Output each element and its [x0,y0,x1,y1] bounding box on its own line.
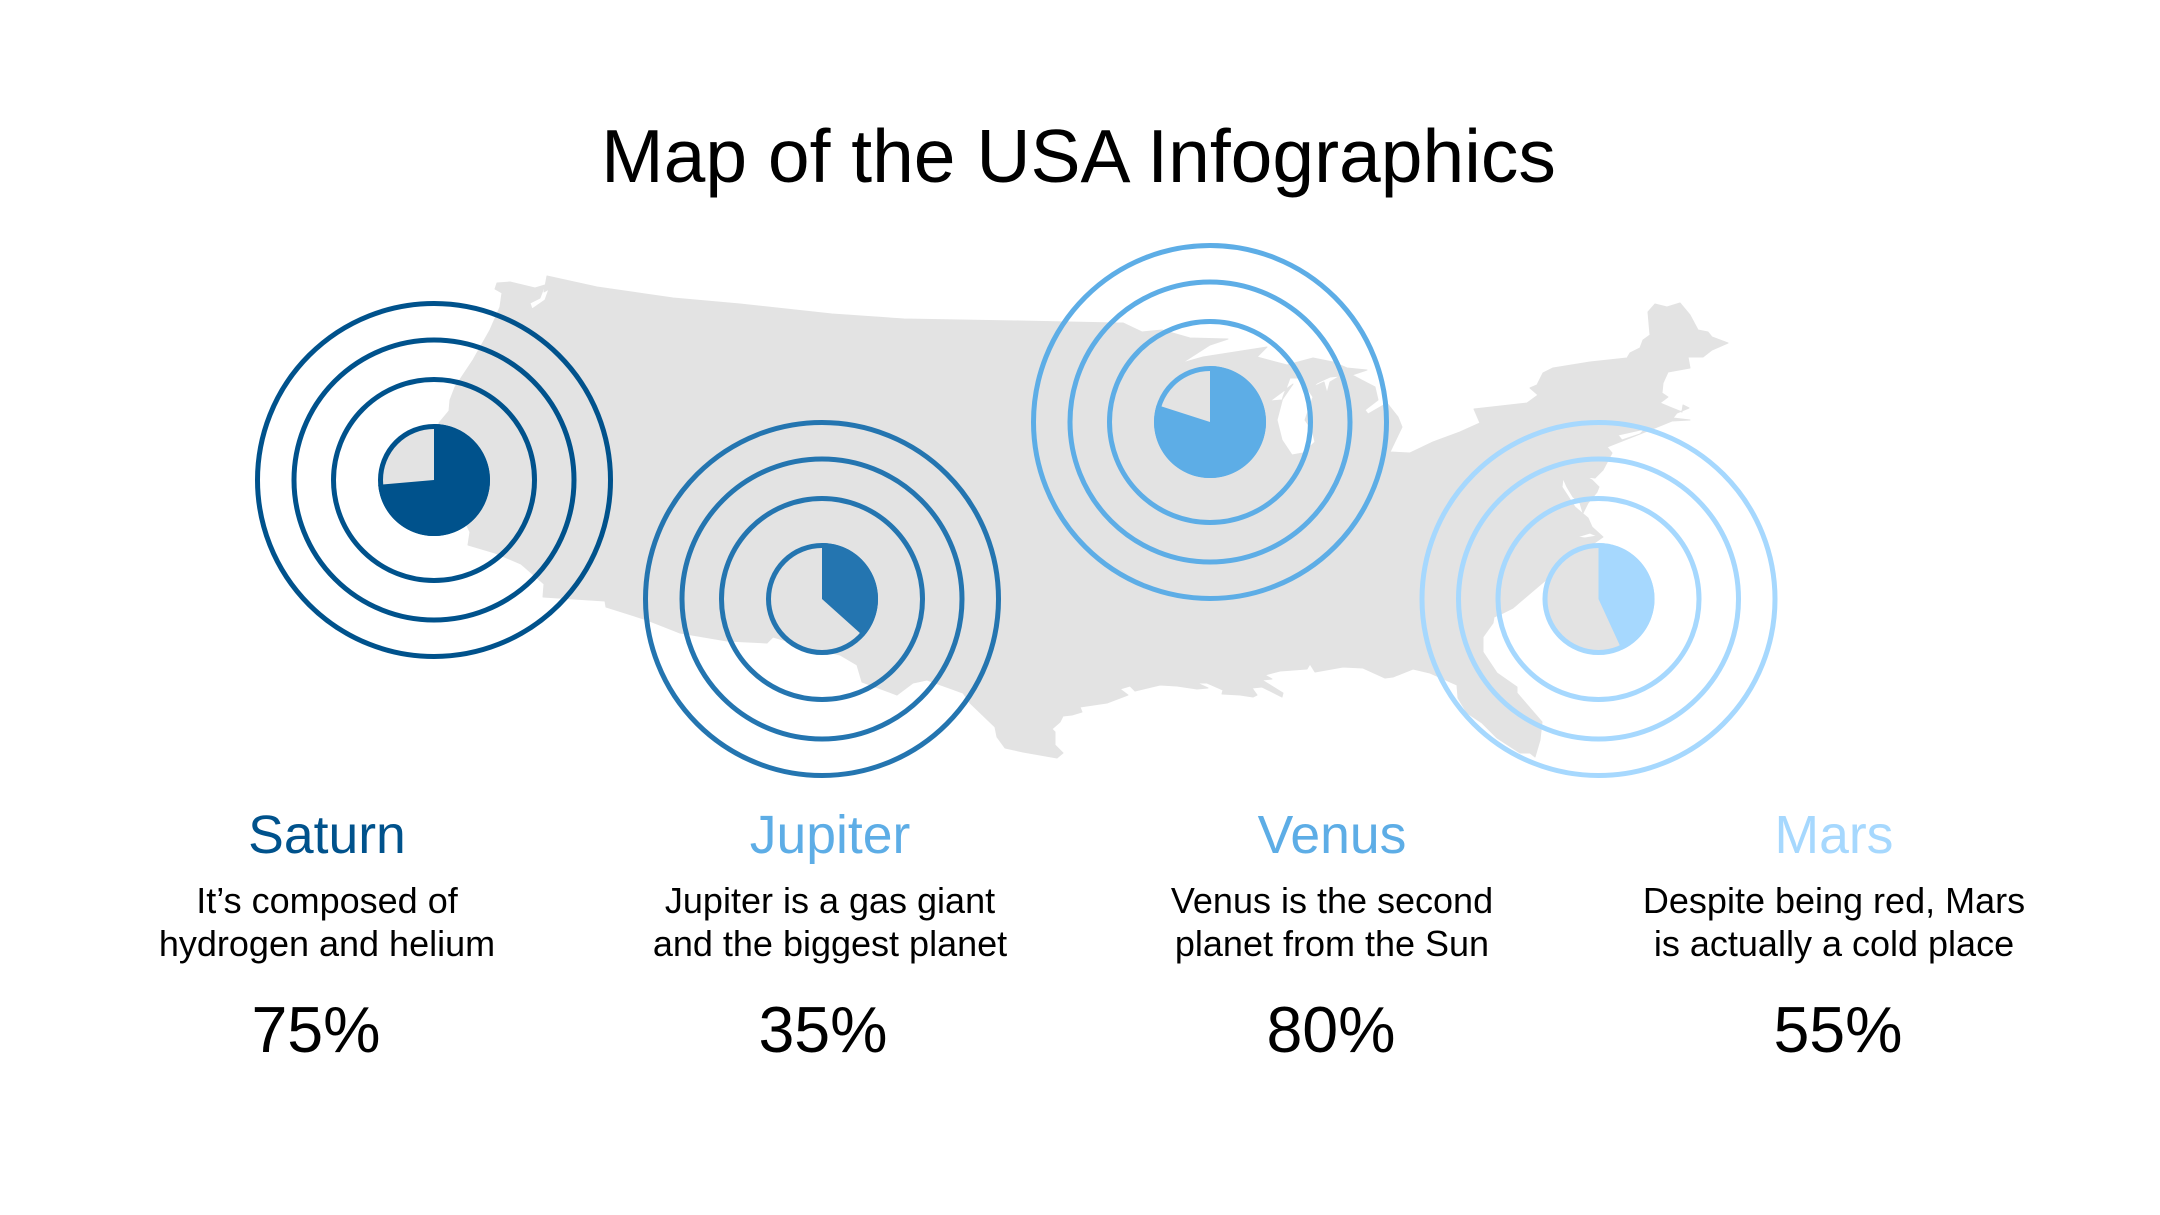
description: Jupiter: and the biggest planet [653,923,1007,964]
heading: Mars: Mars [1775,806,1893,865]
value: Jupiter: 35% [758,994,888,1066]
pie: Venus 80% [1154,366,1266,478]
target: Mars [1422,422,1775,776]
column: Mars [1643,806,2025,1066]
description: Saturn: hydrogen and helium [159,923,495,964]
column: Saturn [159,806,495,1066]
description: Jupiter: Jupiter is a gas giant [665,880,995,921]
target: Venus [1034,246,1386,598]
pie: Saturn 75% [378,424,490,536]
value: Mars: 55% [1773,994,1903,1066]
pie: Mars 55% [1545,543,1655,652]
column: Jupiter [653,806,1007,1066]
description: Saturn: It’s composed of [196,880,459,921]
target: Saturn [258,304,610,656]
value: Saturn: 75% [251,994,381,1066]
heading: Jupiter: Jupiter [750,806,910,865]
description: Venus: planet from the Sun [1175,923,1489,964]
title: Map of the USA Infographics [601,114,1556,198]
column: Venus [1171,806,1493,1066]
heading: Venus: Venus [1258,806,1406,865]
description: Mars: Despite being red, Mars [1643,880,2025,921]
map of the USA [439,276,1728,758]
description: Venus: Venus is the second [1171,880,1493,921]
heading: Saturn: Saturn [248,806,406,865]
target: Jupiter [646,422,998,776]
pie: Jupiter 35% [768,543,878,652]
value: Venus: 80% [1266,994,1396,1066]
description: Mars: is actually a cold place [1654,923,2014,964]
